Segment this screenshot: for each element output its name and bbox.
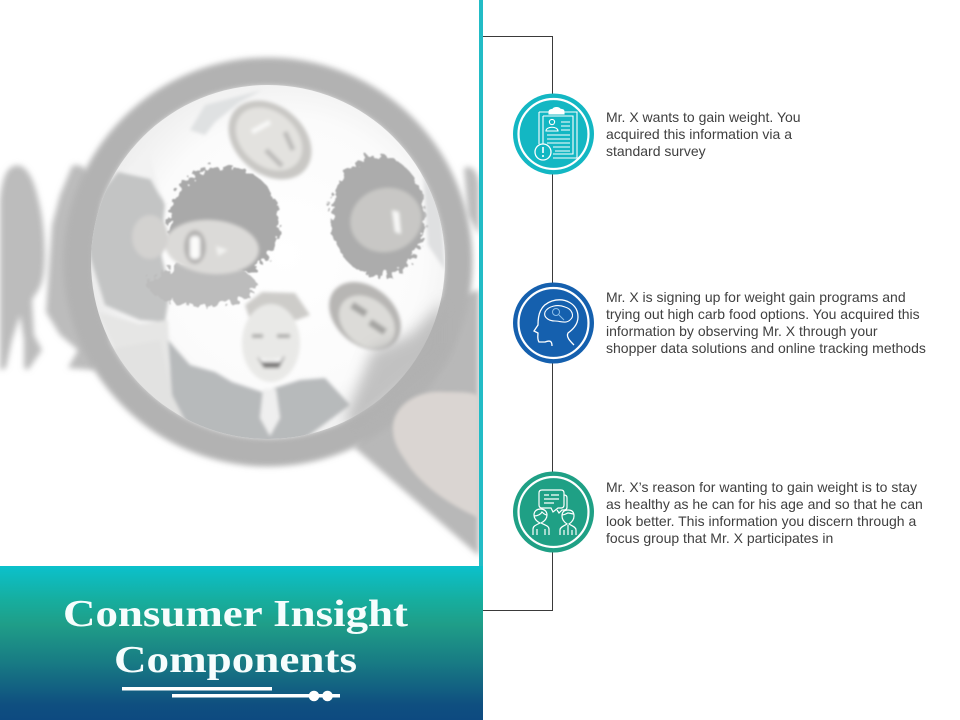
text: observation: information by observing Mr. X through your (606, 323, 878, 339)
text: observation: shopper data solutions and online tracking methods (606, 340, 926, 356)
centre person (106, 292, 350, 442)
handle shoulder shadow (345, 300, 445, 430)
right person hair (331, 156, 425, 276)
text: focus group: focus group that Mr. X participates in (606, 530, 833, 546)
right person face (350, 178, 445, 267)
lower right person (327, 280, 403, 352)
left person face (132, 215, 261, 278)
title: Components (114, 639, 357, 681)
text: focus group: as healthy as he can for his age and so that he can (606, 496, 923, 512)
text: survey: acquired this information via a (606, 126, 792, 142)
title panel (0, 566, 483, 720)
text: observation: trying out high carb food options. You acquired this (606, 306, 920, 322)
text: survey: Mr. X wants to gain weight. You (606, 109, 801, 125)
hand on handle (393, 392, 479, 518)
lens interior (88, 84, 446, 442)
magnifier handle (354, 290, 479, 556)
photo: magnifying glass over group of people (0, 54, 479, 556)
title underline ornament (122, 687, 340, 702)
teal vertical divider (479, 0, 483, 566)
silhouettes of people (0, 165, 479, 370)
text: observation (606, 289, 926, 356)
text: focus group (606, 479, 923, 546)
title: Consumer Insight (63, 593, 408, 635)
lens ring (78, 72, 458, 452)
left person body (91, 171, 170, 374)
text: observation: Mr. X is signing up for weight gain programs and (606, 289, 906, 305)
text: focus group: Mr. X’s reason for wanting to gain weight is to stay (606, 479, 917, 495)
title (63, 593, 408, 681)
top person (190, 92, 313, 182)
text: survey (606, 109, 801, 159)
left person hair (168, 166, 280, 278)
text: survey: standard survey (606, 143, 706, 159)
text: focus group: look better. This information you discern through a (606, 513, 916, 529)
